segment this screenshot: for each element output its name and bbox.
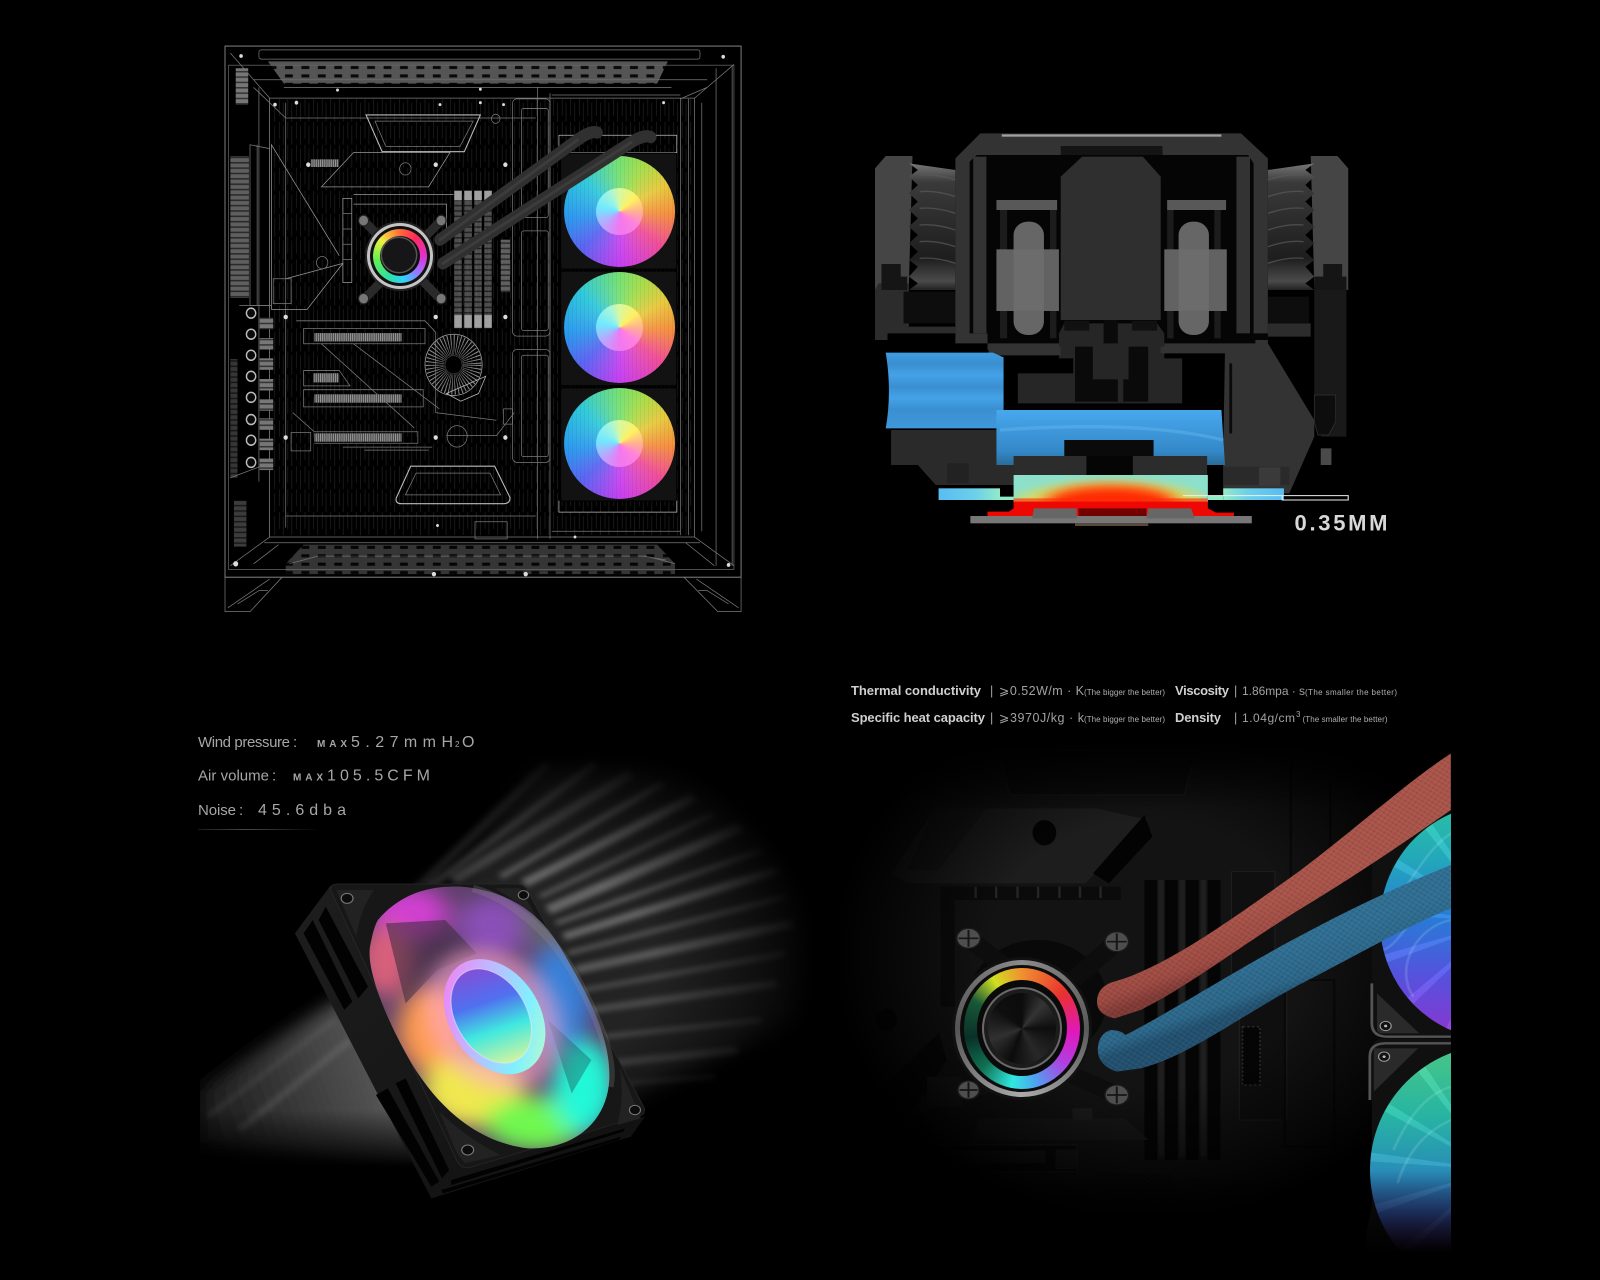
coolant specs: 1.04g/cm xyxy=(1242,711,1295,725)
coolant specs: Density xyxy=(1175,710,1222,725)
clipped RGB fans xyxy=(1370,814,1451,1248)
fan frames xyxy=(1366,777,1451,1260)
corner mounts and screws xyxy=(336,888,641,1163)
fan RGB opening xyxy=(370,886,610,1148)
coolant specs: (The smaller the better) xyxy=(1302,715,1388,724)
RGB fan 2 xyxy=(564,272,675,383)
central piston xyxy=(989,157,1225,403)
panel: CPU block and sleeved hoses close-up xyxy=(895,754,1451,1248)
panel: fan airflow xyxy=(198,734,794,1198)
lower fan xyxy=(1370,1045,1600,1280)
fan frames xyxy=(561,153,677,501)
coolant specs: ⩾0.52W/m · K xyxy=(999,684,1085,698)
coolant specs: (The bigger the better) xyxy=(1084,715,1165,724)
case wireframe drawing xyxy=(224,46,742,612)
coolant specs: Thermal conductivity xyxy=(851,683,982,698)
sleeved hoses xyxy=(1097,754,1451,1184)
specs: airflow figures: 45.6dba xyxy=(258,802,346,819)
coolant specs xyxy=(851,683,1397,725)
panel: PC case wireframe with three RGB fans xyxy=(224,46,742,612)
main housing xyxy=(955,133,1314,493)
coolant specs: | xyxy=(990,711,993,725)
specs: airflow figures: : xyxy=(239,802,243,819)
RGB fan 1 xyxy=(564,156,675,267)
fan front frame xyxy=(331,884,645,1168)
specs: airflow figures: MAX xyxy=(293,772,323,784)
coolant specs: Specific heat capacity xyxy=(851,710,986,725)
CPU block RGB ring xyxy=(955,960,1089,1097)
top and bottom vents xyxy=(268,61,675,574)
panel: water block cross-section xyxy=(875,133,1388,536)
motherboard background xyxy=(895,773,1451,1212)
left and right fitting fins xyxy=(875,156,1348,437)
CPU block RGB ring xyxy=(367,223,433,289)
processor base xyxy=(970,508,1252,526)
red hose xyxy=(1097,753,1451,1018)
blue hose xyxy=(1098,865,1451,1072)
coolant specs: (The bigger the better) xyxy=(1084,688,1165,697)
base plate blocks xyxy=(1014,440,1207,475)
side hatch, ports and slots xyxy=(230,68,510,547)
specs: airflow figures: 105.5CFM xyxy=(327,768,430,784)
coolant specs: | xyxy=(990,684,993,698)
specs: airflow figures: Wind pressure xyxy=(198,734,290,751)
fan hub glow ring xyxy=(400,930,587,1107)
fan with light rays xyxy=(200,764,794,1198)
fan hub xyxy=(596,304,643,351)
coolant specs: Viscosity xyxy=(1175,683,1230,698)
coolant specs: 3 xyxy=(1296,710,1301,719)
coolant hoses xyxy=(434,126,656,270)
screw holes xyxy=(233,54,730,576)
coolant specs: | xyxy=(1234,711,1237,725)
fan hub xyxy=(596,188,643,235)
divider line under specs xyxy=(198,829,320,830)
coolant specs: | xyxy=(1234,684,1237,698)
coolant specs: 1.86mpa · s xyxy=(1242,684,1305,698)
bracket arms and screws xyxy=(957,928,1129,1105)
specs: airflow figures: Air volume xyxy=(198,768,269,784)
specs: airflow figures xyxy=(198,734,610,1132)
callout: gap measurement: 0.35MM xyxy=(1294,510,1388,536)
coolant specs: ⩾3970J/kg · k xyxy=(999,711,1085,725)
heat distribution zone xyxy=(938,475,1284,516)
specs: airflow figures: : xyxy=(293,734,297,751)
lower right body detail xyxy=(891,395,1336,486)
fan hub xyxy=(596,420,643,467)
specs: airflow figures: Noise xyxy=(198,802,236,819)
motor coils xyxy=(996,200,1227,338)
translucent frame edge xyxy=(473,888,610,1087)
chipset heatsink xyxy=(425,334,486,401)
faint board traces xyxy=(271,99,695,535)
specs: airflow figures: 2 xyxy=(455,740,460,749)
callout leader line xyxy=(1183,496,1348,500)
lower left glow xyxy=(200,996,412,1162)
panel: coolant specification text xyxy=(851,683,1397,725)
specs: airflow figures: O xyxy=(462,734,474,751)
cross-section drawing xyxy=(875,133,1349,526)
fan side with fins xyxy=(295,886,645,1198)
bottom fade xyxy=(840,1170,1460,1260)
coolant specs: (The smaller the better) xyxy=(1305,688,1397,697)
specs: airflow figures: 5.27mmH xyxy=(351,734,453,751)
coolant channel xyxy=(886,353,1225,465)
upper fan xyxy=(1380,804,1600,1040)
light rays xyxy=(414,764,794,1096)
mounting bracket xyxy=(359,215,446,304)
specs: airflow figures: : xyxy=(272,768,276,784)
RGB fan 3 xyxy=(564,388,675,499)
specs: airflow figures: MAX xyxy=(317,739,347,750)
